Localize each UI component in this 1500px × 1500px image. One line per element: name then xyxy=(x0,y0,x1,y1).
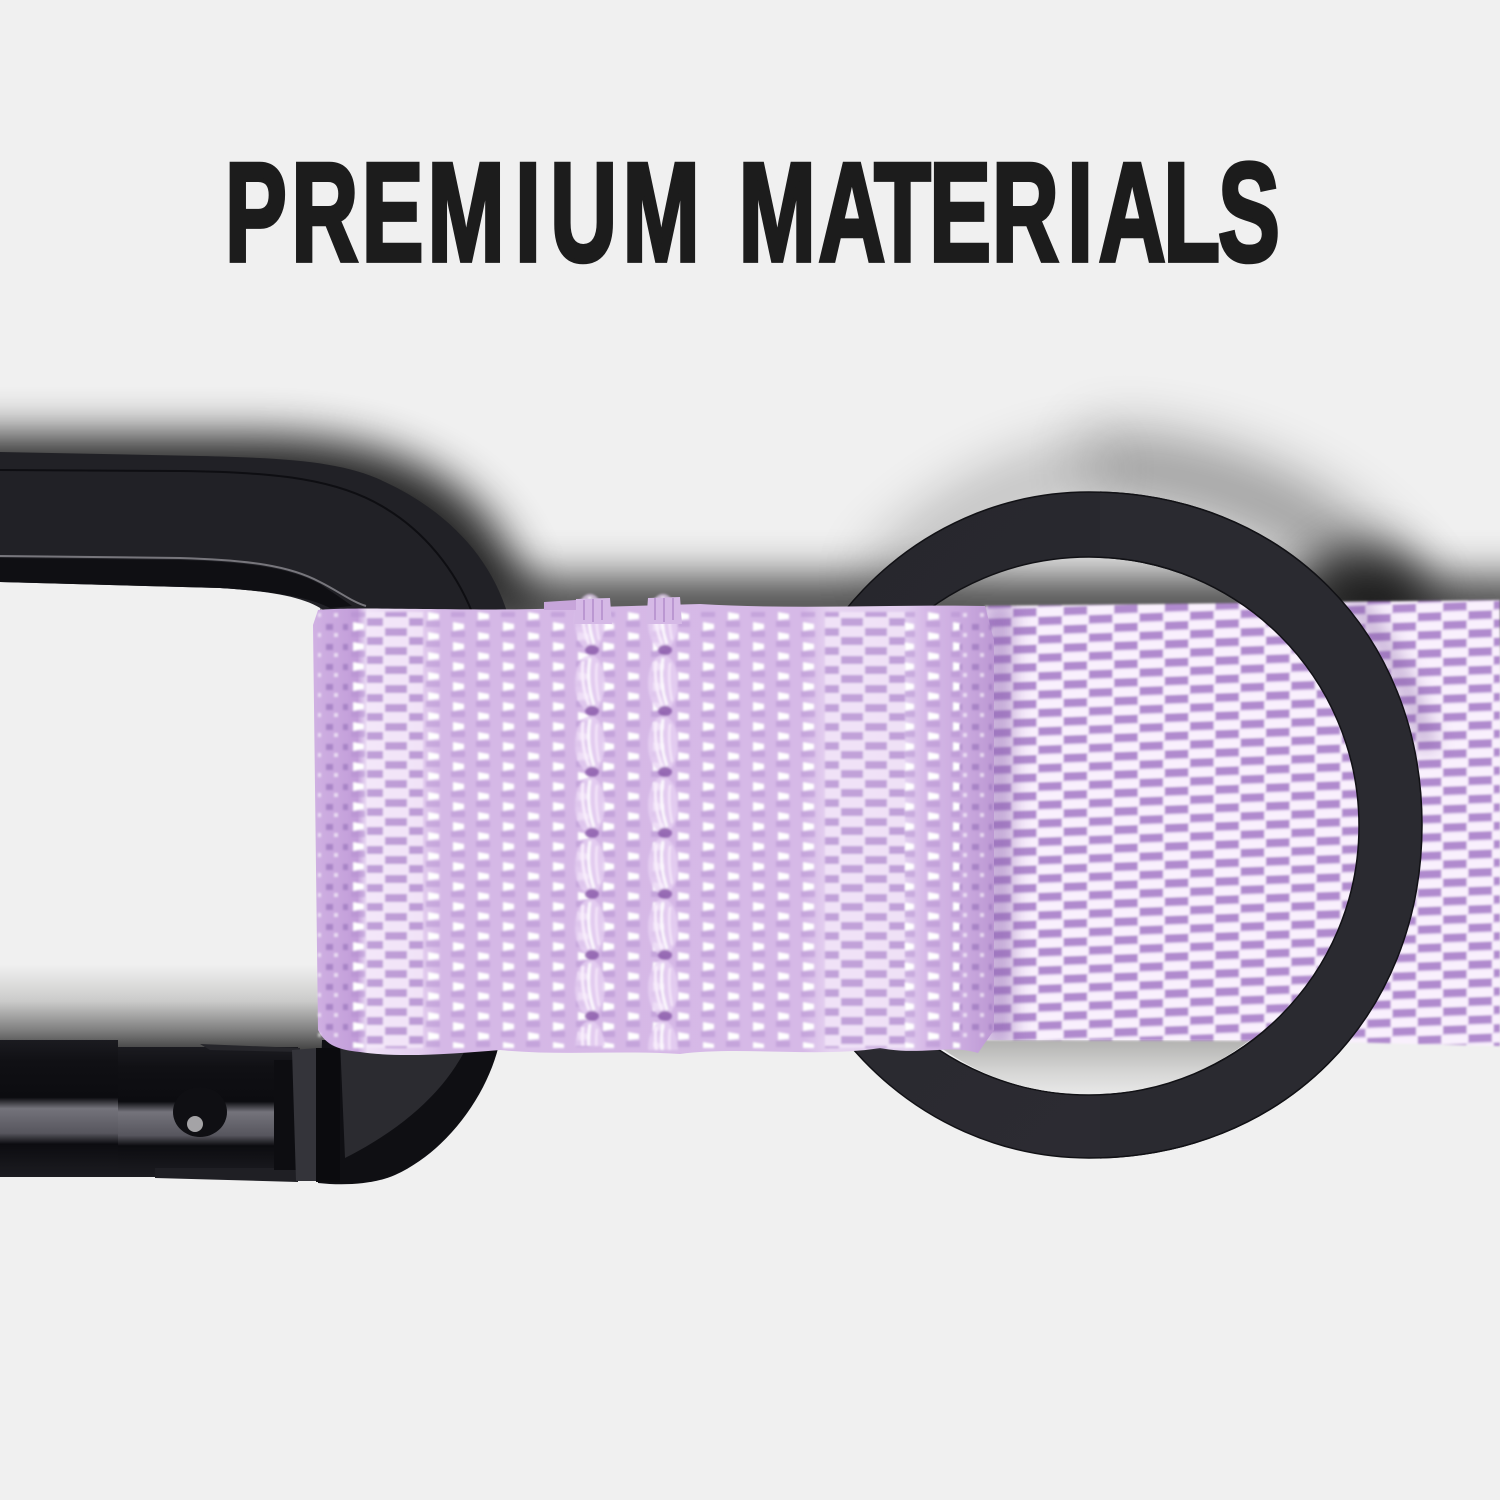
carabiner lower shadow fade xyxy=(0,965,325,1055)
carabiner gate and lower body xyxy=(0,1040,500,1184)
weave: right checker band xyxy=(825,612,905,1048)
ring hole shadow below strap xyxy=(930,1040,1250,1094)
weave: fine left edge xyxy=(318,612,348,1044)
ring segment over strap xyxy=(1100,491,1423,1159)
weave: right dots xyxy=(905,612,960,1048)
icon: gate rivet xyxy=(173,1087,227,1137)
stitch line right xyxy=(633,594,693,1050)
weave: fine right edge xyxy=(960,612,992,1042)
webbing: right strap xyxy=(984,491,1500,1159)
carabiner top arm xyxy=(0,452,508,615)
title: PREMIUM MATERIALS xyxy=(225,134,1280,291)
cast shadows xyxy=(0,435,1500,680)
weave: left checker band xyxy=(367,612,423,1048)
carabiner interior opening xyxy=(0,582,320,977)
weave: dots field xyxy=(425,612,825,1048)
steel ring xyxy=(770,492,1422,1158)
weave: left dot column xyxy=(345,612,366,1048)
webbing: stitched loop xyxy=(313,594,994,1055)
stitch line left xyxy=(544,594,620,1046)
